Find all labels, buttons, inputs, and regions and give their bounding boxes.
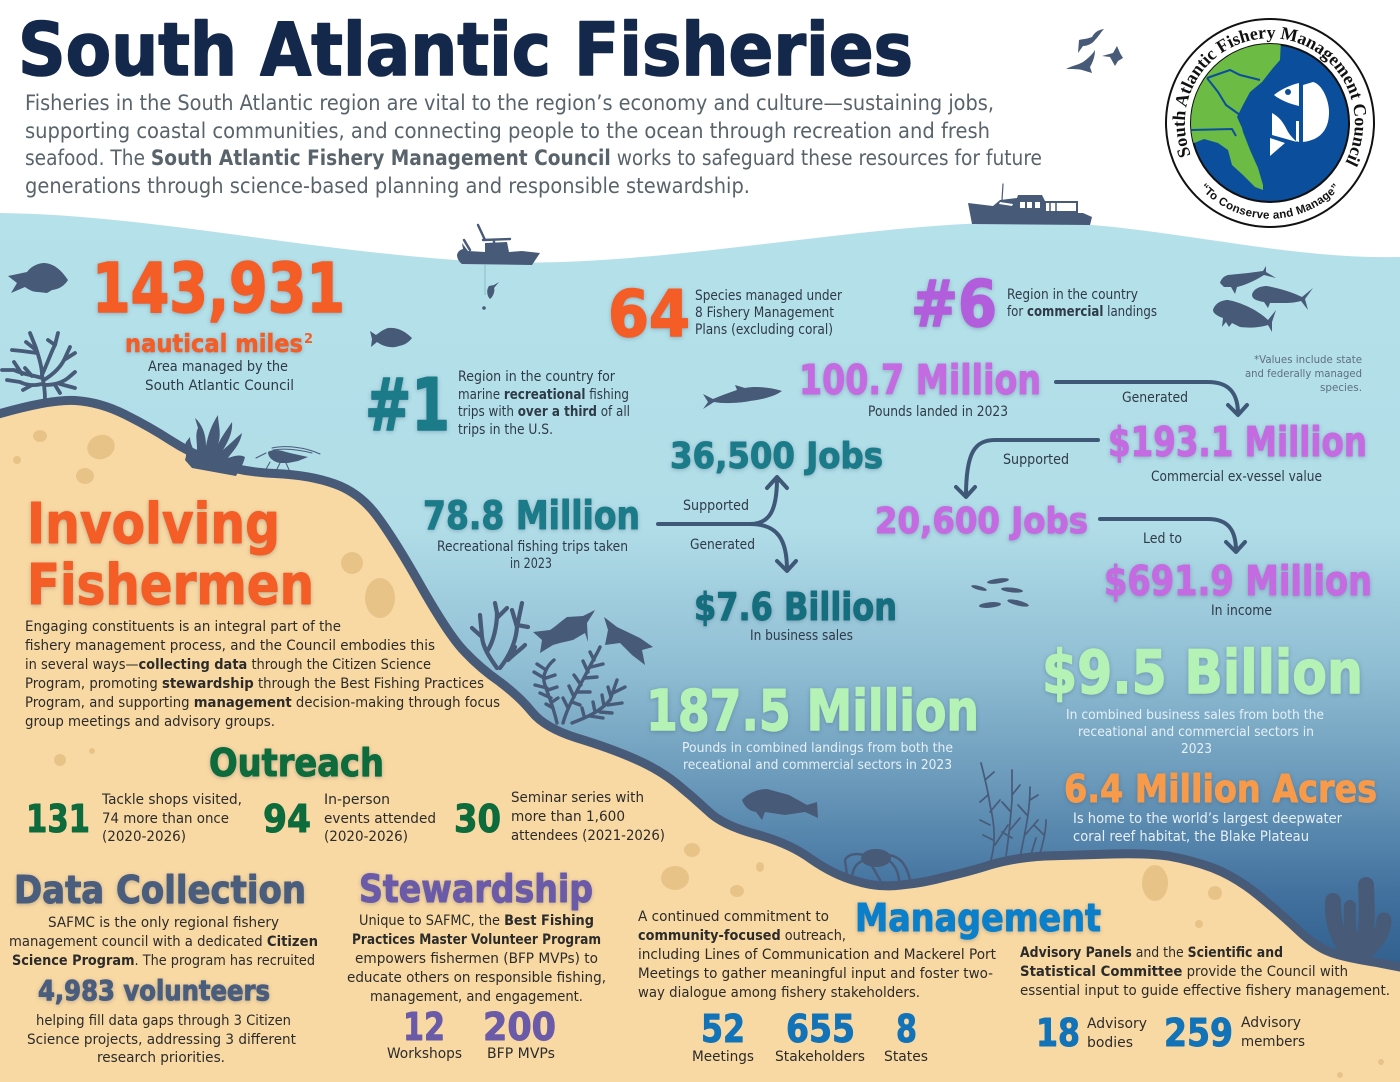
panel: management: Advisory [1087, 1016, 1147, 1032]
icon: kelp [185, 415, 245, 476]
stat: #6 commercial region: #6 [911, 268, 997, 342]
panel: involving fishermen: Program, and supporting management decision-making through focus [25, 695, 500, 711]
flow: recreational trips: $7.6 Billion [694, 585, 897, 629]
stat: 143,931 nautical miles: South Atlantic Council [145, 378, 294, 394]
stat: 143,931 nautical miles [92, 249, 345, 394]
arrow: jobs to income [1100, 519, 1245, 552]
panel: involving fishermen: Program, promoting stewardship through the Best Fishing Practices [25, 676, 484, 692]
flow: commercial landings [799, 356, 1372, 619]
flow: recreational trips: in 2023 [510, 556, 552, 572]
flow: recreational trips: Recreational fishing trips taken [437, 539, 628, 555]
stat: 64 species: Plans (excluding coral) [695, 322, 833, 338]
stat: $9.5 Billion sales: 2023 [1181, 741, 1212, 757]
stat: 187.5 Million landings: 187.5 Million [646, 679, 979, 744]
panel: management: Statistical Committee provide the Council with [1020, 964, 1348, 980]
icon: lobster [256, 447, 320, 472]
panel: management: Meetings to gather meaningful input and foster two- [638, 966, 993, 982]
panel: management: including Lines of Communication and Mackerel Port [638, 947, 996, 963]
panel: management: members [1241, 1034, 1305, 1050]
panel: data collection: helping fill data gaps through 3 Citizen [36, 1013, 291, 1029]
panel: data collection: SAFMC is the only regional fishery [48, 915, 279, 931]
panel: outreach: attendees (2021-2026) [511, 828, 665, 844]
flow: commercial landings: Led to [1143, 531, 1182, 547]
logo: South Atlantic Fishery Management Council: “To Conserve and Manage” [1204, 183, 1336, 219]
panel: stewardship: management, and engagement. [370, 989, 583, 1005]
panel: management: community-focused outreach, [638, 928, 846, 944]
panel: data collection [9, 868, 318, 1066]
icon: yacht [968, 184, 1092, 225]
intro paragraph: Fisheries in the South Atlantic region are vital to the region’s economy and culture—sustaining jobs, [25, 91, 994, 115]
panel: involving fishermen: group meetings and advisory groups. [25, 714, 275, 730]
stat: #6 commercial region [911, 268, 1157, 342]
panel: stewardship: Stewardship [359, 867, 593, 911]
stat: #1 recreational region: trips with over a third of all [458, 404, 630, 420]
icon: mahi mahi trio [1213, 266, 1313, 332]
icon: fishing boat with line and fish [457, 225, 540, 310]
panel: outreach: 94 [263, 797, 311, 841]
panel: outreach: Outreach [209, 741, 384, 785]
stat: #1 recreational region: trips in the U.S. [458, 422, 553, 438]
panel: management: 52 [701, 1007, 745, 1051]
stat: #6 commercial region: Region in the country [1007, 287, 1138, 303]
stat: #1 recreational region: Region in the country for [458, 369, 615, 385]
footnote: values [1245, 353, 1362, 394]
icon: shrimp school [971, 577, 1029, 609]
panel: management: 259 [1164, 1011, 1233, 1055]
panel: management: way dialogue among fishery stakeholders. [638, 985, 920, 1001]
flow: recreational trips: In business sales [750, 628, 853, 644]
panel: data collection: research priorities. [97, 1050, 225, 1066]
panel: outreach: (2020-2026) [324, 829, 408, 845]
panel: management: Meetings [692, 1049, 754, 1065]
icon: tuna [703, 385, 782, 409]
stat: 6.4 Million Acres: Is home to the world’s largest deepwater [1073, 811, 1342, 827]
panel: involving fishermen: Involving [27, 492, 280, 557]
stat: 6.4 Million Acres [1064, 767, 1377, 845]
stat: 64 species: 8 Fishery Management [695, 305, 834, 321]
flow: commercial landings: Pounds landed in 2023 [868, 404, 1008, 420]
stat: $9.5 Billion sales: In combined business sales from both the [1066, 707, 1324, 723]
panel: stewardship: 12 [403, 1005, 445, 1049]
panel: stewardship: BFP MVPs [487, 1046, 555, 1062]
footnote: values: species. [1320, 381, 1362, 394]
panel: management: bodies [1087, 1035, 1133, 1051]
icon: sea fan [980, 763, 1046, 863]
stat: 187.5 Million landings: Pounds in combined landings from both the [682, 740, 953, 756]
arrow: trips branching to jobs and sales [658, 477, 796, 571]
intro paragraph: generations through science-based planning and responsible stewardship. [25, 174, 750, 198]
icon: tube sponge [1333, 885, 1384, 952]
panel: stewardship: Unique to SAFMC, the Best Fishing [359, 913, 594, 929]
flow: recreational trips [423, 436, 897, 644]
intro paragraph: supporting coastal communities, and connecting people to the ocean through recreation and fresh [25, 119, 990, 143]
panel: stewardship: educate others on responsible fishing, [347, 970, 606, 986]
panel: stewardship: Practices Master Volunteer Program [352, 932, 601, 948]
stat: 143,931 nautical miles: 2 [304, 332, 313, 347]
stat: 64 species: 64 [608, 278, 690, 352]
stat: 187.5 Million landings [646, 679, 979, 773]
stat: 187.5 Million landings: receational and commercial sectors in 2023 [683, 757, 952, 773]
panel: outreach: 30 [454, 797, 501, 841]
icon: reef fish left [8, 263, 68, 293]
panel: management: Advisory [1241, 1015, 1301, 1031]
panel: outreach [26, 741, 665, 845]
panel: outreach: 131 [26, 797, 90, 841]
logo fish [1270, 82, 1329, 156]
flow: recreational trips: 78.8 Million [423, 494, 640, 539]
intro paragraph: seafood. The South Atlantic Fishery Management Council works to safeguard these resources for future [25, 146, 1042, 170]
panel: data collection: Science projects, addressing 3 different [27, 1032, 296, 1048]
panel: management: Advisory Panels and the Scientific and [1020, 945, 1283, 961]
panel: outreach: Seminar series with [511, 790, 644, 806]
logo ring text: South Atlantic Fishery Management Council [1172, 26, 1366, 167]
stat: 6.4 Million Acres: coral reef habitat, the Blake Plateau [1073, 829, 1309, 845]
flow: recreational trips: 36,500 Jobs [670, 436, 883, 477]
stat: #1 recreational region [365, 363, 630, 447]
stat: 143,931 nautical miles: nautical miles [125, 329, 303, 358]
panel: management: Stakeholders [775, 1049, 865, 1065]
panel: involving fishermen: fishery management process, and the Council embodies this [25, 638, 435, 654]
panel: involving fishermen: in several ways—collecting data through the Citizen Science [25, 657, 431, 673]
flow: commercial landings: 100.7 Million [799, 356, 1041, 404]
icon: seaweed branches [472, 603, 528, 668]
stat: #6 commercial region: for commercial landings [1007, 304, 1157, 320]
flow: commercial landings: Generated [1122, 390, 1188, 406]
arrow: value to jobs [956, 440, 1098, 497]
arrow: landings to value [1056, 382, 1247, 415]
stat: $9.5 Billion sales: receational and commercial sectors in [1078, 724, 1314, 740]
stat: #1 recreational region: marine recreational fishing [458, 387, 629, 403]
icon: birds [1066, 29, 1123, 73]
panel: outreach: 74 more than once [102, 811, 229, 827]
flow: commercial landings: 20,600 Jobs [875, 501, 1088, 542]
stat: 143,931 nautical miles: 143,931 [92, 249, 345, 329]
panel: data collection: management council with a dedicated Citizen [9, 934, 318, 950]
stat: 64 species: Species managed under [695, 288, 842, 304]
stat: 143,931 nautical miles: Area managed by the [148, 359, 288, 375]
flow: commercial landings: In income [1211, 603, 1272, 619]
flow: recreational trips: Generated [690, 537, 755, 553]
panel: outreach: more than 1,600 [511, 809, 625, 825]
panel: stewardship [347, 867, 606, 1062]
panel: data collection: Data Collection [14, 868, 306, 912]
panel: management: 8 [896, 1007, 917, 1051]
icon: feather kelp [534, 647, 625, 723]
panel: stewardship: empowers fishermen (BFP MVPs) to [355, 951, 598, 967]
panel: management: 655 [786, 1007, 855, 1051]
panel: management: Management [855, 896, 1101, 940]
panel: management: essential input to guide effective fishery management. [1020, 983, 1390, 999]
icon: crab [845, 849, 910, 880]
intro paragraph [25, 91, 1042, 198]
panel: involving fishermen: Engaging constituents is an integral part of the [25, 619, 341, 635]
title: South Atlantic Fisheries [18, 8, 913, 93]
panel: management: States [884, 1049, 928, 1065]
panel: management: 18 [1036, 1011, 1080, 1055]
footnote: values: and federally managed [1245, 367, 1362, 380]
panel: involving fishermen: Fishermen [27, 553, 314, 618]
panel: management [638, 896, 1390, 1065]
panel: data collection: 4,983 volunteers [38, 974, 270, 1007]
panel: outreach: In-person [324, 792, 390, 808]
stat: $9.5 Billion sales [1042, 638, 1363, 757]
panel: data collection: Science Program. The program has recruited [12, 953, 315, 969]
flow: recreational trips: Supported [683, 498, 749, 514]
icon: grouper [742, 789, 818, 820]
panel: management: A continued commitment to [638, 909, 829, 925]
icon: small reef fish [370, 328, 412, 347]
panel: stewardship: Workshops [387, 1046, 462, 1062]
stat: 64 species [608, 278, 842, 352]
panel: outreach: Tackle shops visited, [101, 792, 242, 808]
icon: coral tree [2, 333, 75, 400]
footnote: values: *Values include state [1254, 353, 1362, 366]
icon: hogfish pair [533, 610, 653, 665]
panel: outreach: (2020-2026) [102, 829, 186, 845]
sandy seabed [0, 400, 1400, 1082]
logo map of the southeast [1191, 44, 1281, 190]
panel: stewardship: 200 [483, 1005, 556, 1049]
panel: involving fishermen [25, 492, 500, 730]
panel: outreach: events attended [324, 811, 436, 827]
flow: commercial landings: Supported [1003, 452, 1069, 468]
flow: commercial landings: Commercial ex-vessel value [1151, 469, 1322, 485]
logo: South Atlantic Fishery Management Council [1165, 18, 1375, 228]
stat: #1 recreational region: #1 [365, 363, 450, 447]
